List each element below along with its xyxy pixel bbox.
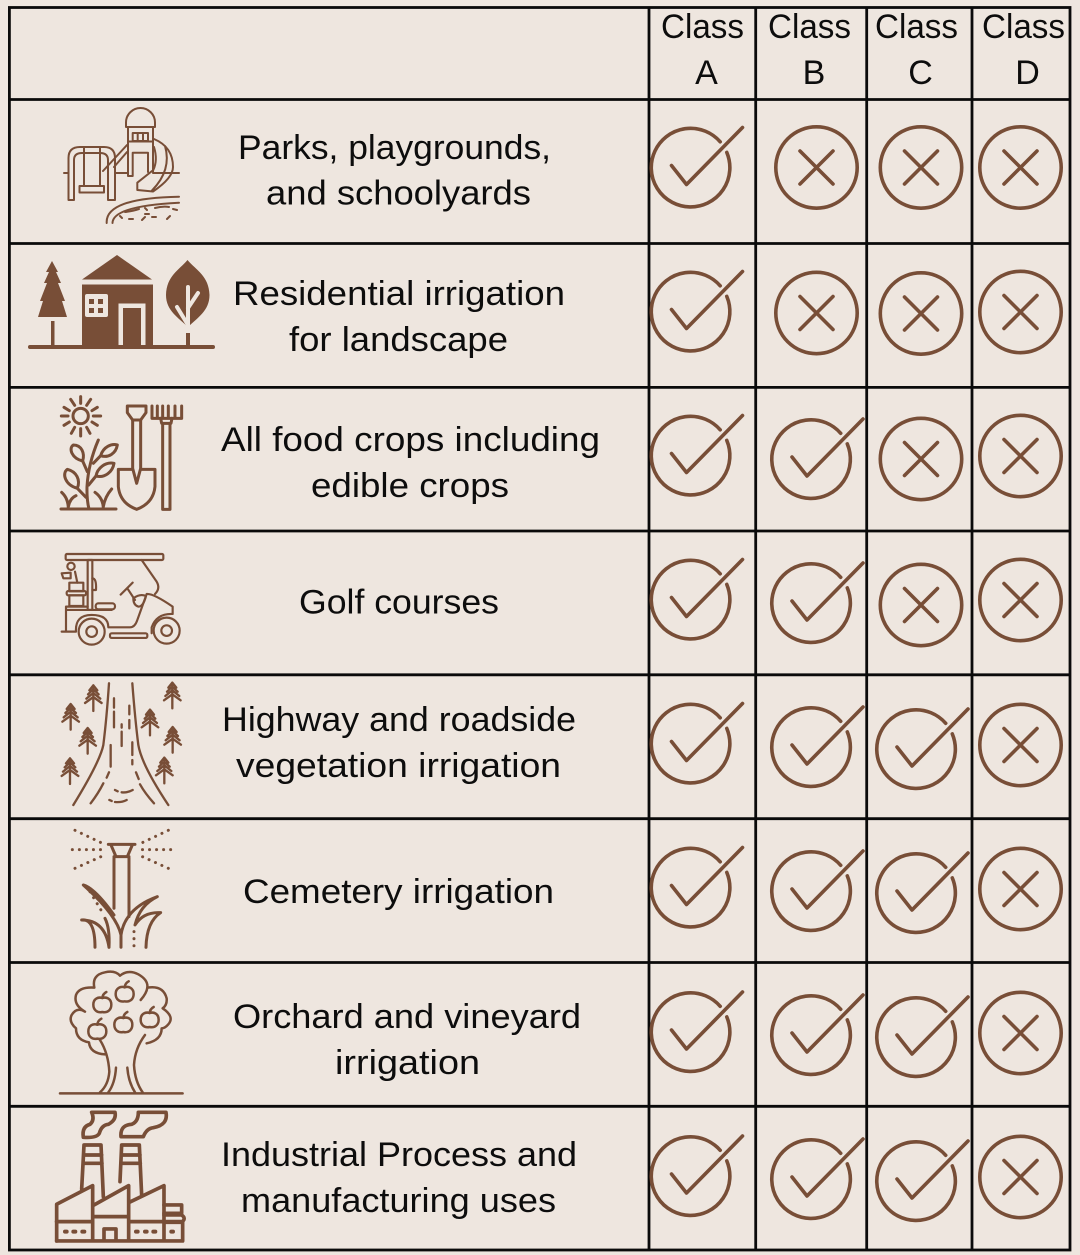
row text: food crops: edible crops: [311, 467, 509, 505]
row text: highway: vegetation irrigation: [236, 747, 561, 785]
header: class labels: B: [803, 54, 825, 92]
header: class labels: Class: [982, 8, 1065, 46]
header: class labels: [661, 8, 1065, 92]
row text: orchard: Orchard and vineyard: [233, 998, 581, 1036]
row text: parks: [238, 129, 551, 212]
icon: highway through trees: [62, 683, 181, 805]
header: class labels: Class: [661, 8, 744, 46]
class C marks: [877, 127, 968, 1220]
class B marks: [772, 127, 863, 1218]
row text: industrial: Industrial Process and: [221, 1136, 577, 1174]
row text: residential: Residential irrigation: [233, 275, 565, 313]
header: class labels: D: [1015, 54, 1040, 92]
icon: house with trees: [28, 255, 215, 349]
header: class labels: Class: [875, 8, 958, 46]
row text: orchard: irrigation: [335, 1044, 480, 1082]
row text: orchard: [233, 998, 581, 1082]
row text: golf: Golf courses: [299, 584, 499, 622]
header: class labels: A: [695, 54, 718, 92]
row text: food crops: [221, 421, 600, 505]
row text: highway: [222, 701, 576, 785]
row text: food crops: All food crops including: [221, 421, 600, 459]
row text: parks: Parks, playgrounds,: [238, 129, 551, 167]
row text: cemetery: Cemetery irrigation: [243, 873, 554, 911]
row text: industrial: [221, 1136, 577, 1220]
icon: playground: [64, 108, 179, 223]
icon: apple tree: [60, 972, 183, 1093]
header: class labels: C: [908, 54, 933, 92]
class A marks: [651, 128, 742, 1215]
row text: parks: and schoolyards: [266, 174, 531, 212]
row text: residential: [233, 275, 565, 359]
header: class labels: Class: [768, 8, 851, 46]
row text: residential: for landscape: [289, 321, 508, 359]
row text: industrial: manufacturing uses: [241, 1182, 556, 1220]
icon: golf cart: [62, 554, 180, 645]
icon: plant and garden tools: [61, 397, 182, 509]
class D marks: [980, 127, 1061, 1218]
row text: highway: Highway and roadside: [222, 701, 576, 739]
icon: sprinkler in grass: [72, 830, 171, 947]
icon: factory: [57, 1112, 184, 1241]
